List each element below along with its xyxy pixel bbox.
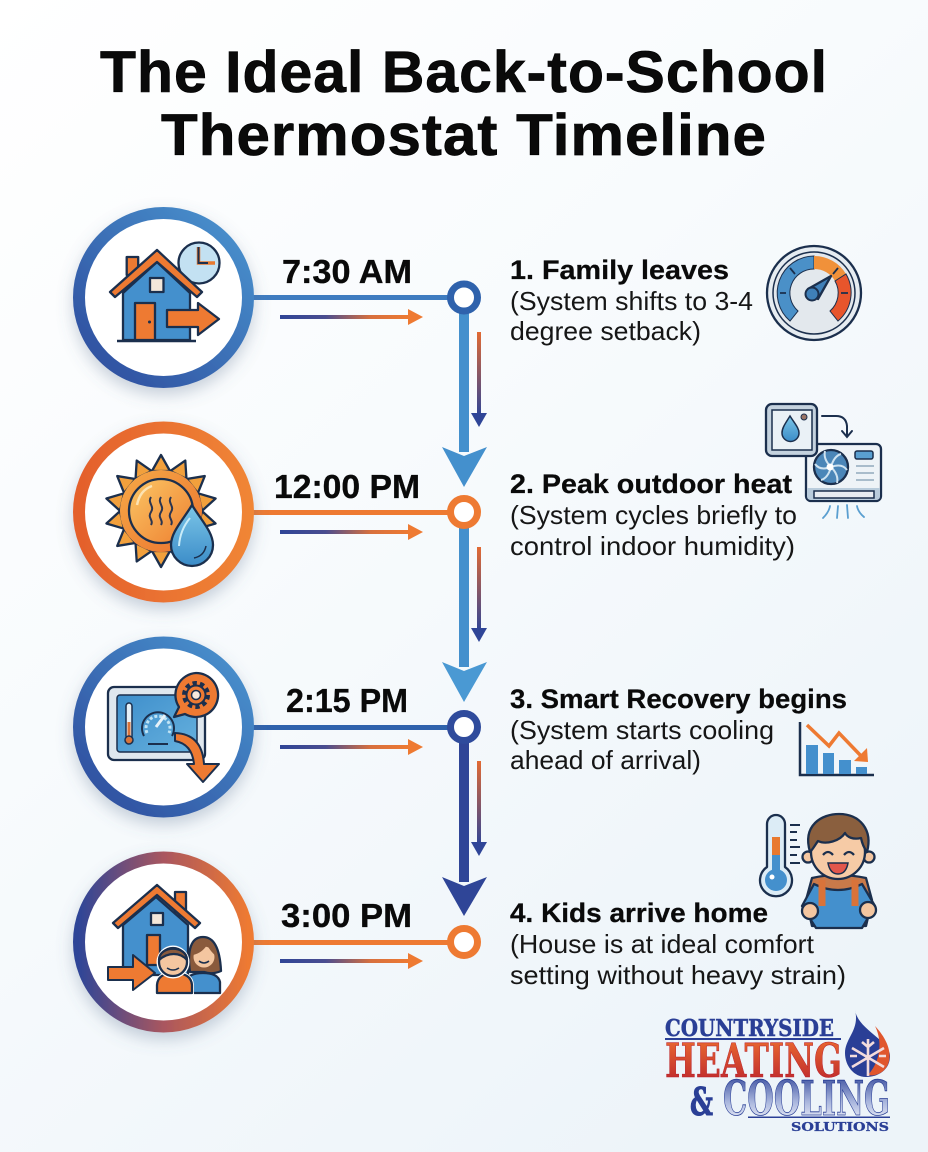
- logo snowflake: [850, 1039, 886, 1076]
- small right arrow 1: [280, 309, 423, 325]
- icon: boy: [157, 947, 192, 993]
- icon: smiling kid: [802, 814, 876, 928]
- timeline spine: [442, 310, 487, 916]
- arrow: 12:00 PM to 2:15 PM: [442, 525, 487, 702]
- time label 3: 2:15 PM: [286, 682, 408, 719]
- step text 3: (System starts cooling: [510, 715, 774, 745]
- step 4: kids arrive home: [79, 814, 876, 1026]
- AC unit: [806, 444, 881, 501]
- icon: girl: [186, 937, 221, 993]
- time label 1: 7:30 AM: [282, 253, 412, 290]
- logo line 1: COUNTRYSIDE: [665, 1015, 834, 1042]
- step text 4: [510, 898, 846, 990]
- icon: exit arrow: [167, 303, 219, 335]
- icon: water drop: [171, 505, 213, 566]
- step text 2: 2. Peak outdoor heat: [510, 469, 792, 499]
- icon circle: house with clock and arrow: [79, 213, 248, 382]
- humidity sensor box: [766, 404, 817, 456]
- logo ampersand: &: [690, 1079, 713, 1124]
- icon: falling bar chart: [800, 722, 874, 775]
- small down arrow 3: [471, 761, 487, 856]
- step text 1: [510, 255, 753, 346]
- time label 2: 12:00 PM: [274, 468, 420, 505]
- flow arrow: [822, 416, 852, 437]
- step text 3: ahead of arrival): [510, 745, 701, 775]
- logo line 2: HEATING: [665, 1034, 842, 1089]
- small down arrow 2: [471, 547, 487, 642]
- logo flame: [845, 1010, 890, 1077]
- step text 2: (System cycles briefly to: [510, 500, 797, 530]
- icon circle: smart thermostat: [79, 642, 248, 812]
- connector 1: [250, 284, 478, 311]
- step 2: peak outdoor heat: [79, 404, 881, 596]
- step text 4: (House is at ideal comfort: [510, 929, 815, 959]
- icon: temperature gauge: [767, 246, 861, 340]
- icon: house: [110, 250, 202, 341]
- logo: Countryside Heating & Cooling Solutions: [665, 1010, 890, 1134]
- icon: curved down arrow: [175, 733, 219, 782]
- step 1: family leaves: [79, 213, 861, 382]
- icon: thermometer: [760, 815, 800, 896]
- connector 2: [250, 498, 478, 526]
- icon: sun: [104, 455, 218, 567]
- step text 4: setting without heavy strain): [510, 960, 846, 990]
- step text 1: 1. Family leaves: [510, 255, 729, 285]
- icon circle: sun and water drop: [79, 428, 248, 596]
- icon: arrive arrow: [108, 955, 155, 990]
- connector 4: [250, 928, 478, 956]
- small right arrow 4: [280, 953, 423, 969]
- icon: clock: [178, 242, 220, 284]
- air vents: [823, 505, 864, 518]
- step 3: smart recovery: [79, 642, 874, 812]
- title: Thermostat Timeline: [161, 103, 767, 168]
- step text 3: 3. Smart Recovery begins: [510, 684, 847, 714]
- logo rule 2: [748, 1116, 890, 1118]
- icon circle: house and kids: [79, 858, 248, 1026]
- step text 4: 4. Kids arrive home: [510, 898, 768, 928]
- title: [100, 40, 828, 168]
- step text 1: degree setback): [510, 316, 701, 346]
- logo rule 1: [665, 1038, 841, 1040]
- small right arrow 3: [280, 739, 423, 755]
- small right arrow 2: [280, 524, 423, 540]
- step text 3: [510, 684, 847, 775]
- connector 3: [250, 714, 478, 740]
- logo line 4: SOLUTIONS: [791, 1120, 889, 1134]
- icon: house: [113, 885, 200, 975]
- icon: gear bubble: [174, 673, 218, 717]
- icon: humidity sensor and air conditioner: [766, 404, 881, 518]
- step text 1: (System shifts to 3-4: [510, 286, 753, 316]
- arrow: 7:30 AM to 12:00 PM: [442, 310, 487, 487]
- title: The Ideal Back-to-School: [100, 40, 828, 105]
- step text 2: control indoor humidity): [510, 531, 795, 561]
- arrow: 2:15 PM to 3:00 PM: [442, 740, 487, 916]
- icon: tablet: [108, 687, 205, 760]
- step text 2: [510, 469, 797, 561]
- small down arrow 1: [471, 332, 487, 427]
- time label 4: 3:00 PM: [281, 897, 412, 934]
